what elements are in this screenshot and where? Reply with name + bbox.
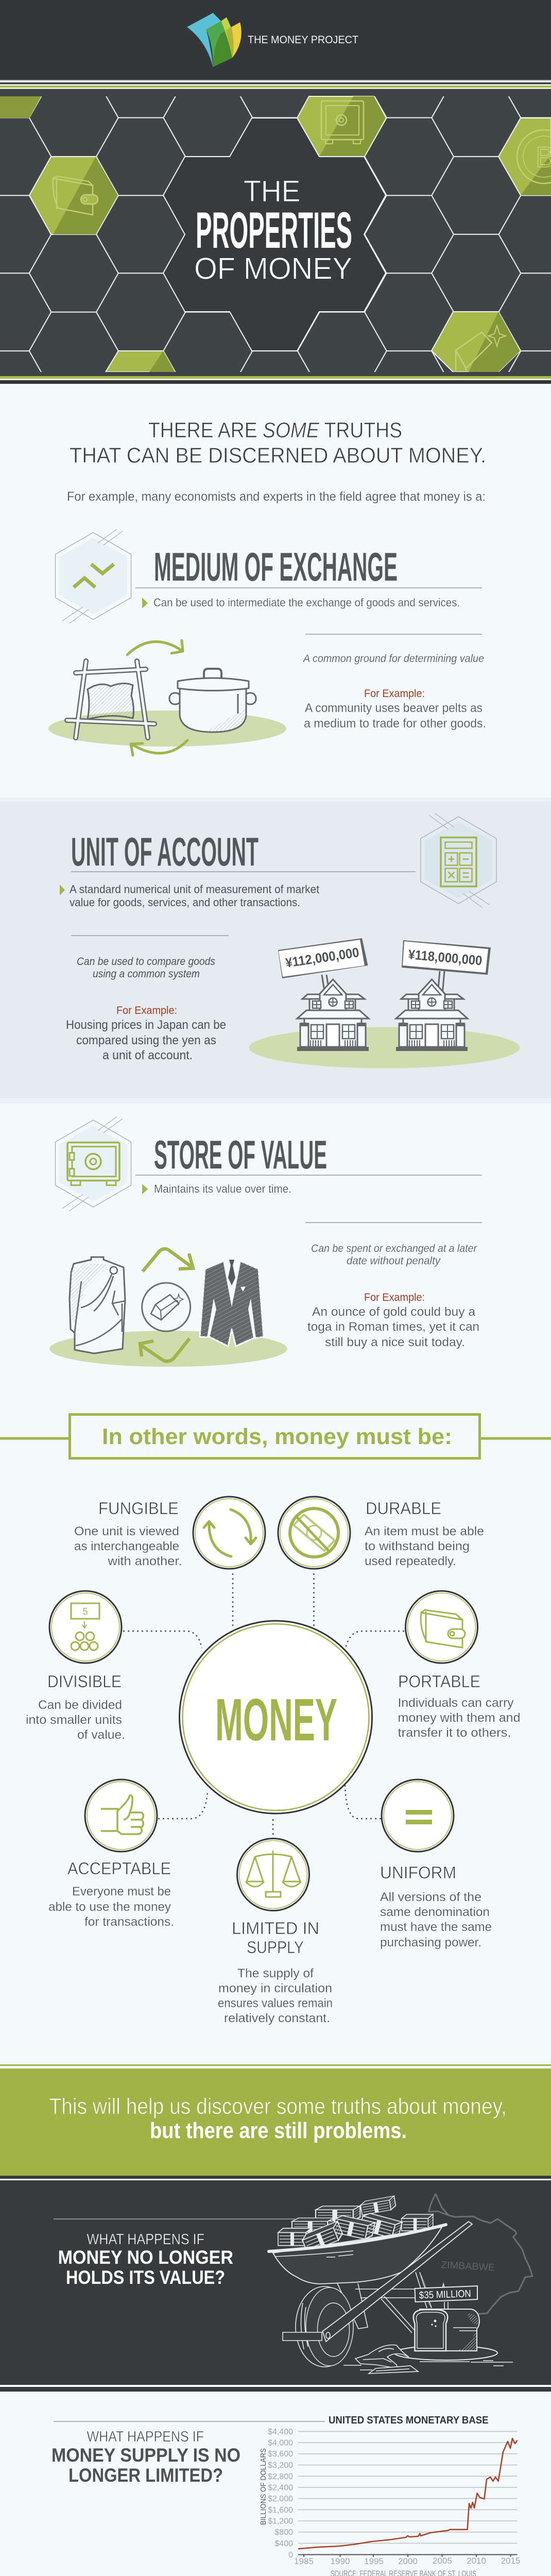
subtext [311,1243,477,1267]
property: fungible: as interchangeable [74,1539,179,1553]
example text: a unit of account. [102,1048,193,1062]
example text: For Example: [364,688,425,700]
icon: suit jacket [200,1260,264,1346]
hero bottom stripes [0,372,551,384]
illustration: houses with yen prices [249,938,520,1069]
property: limited in supply: LIMITED IN [232,1919,319,1938]
property: portable: transfer it to others. [398,1726,511,1740]
subtext: using a common system [93,968,200,980]
property: divisible: Can be divided [38,1698,122,1712]
connectors [123,1573,404,1836]
property: uniform: All versions of the [380,1890,481,1904]
arrow: bottom [140,1338,190,1361]
property: uniform: must have the same [380,1920,492,1934]
hexagon: wallet icon [29,157,118,234]
property: uniform: same denomination [380,1905,490,1919]
line chart: US monetary base [259,2415,520,2576]
logo: The Money Project [187,13,242,67]
y axis labels: $2,800 [268,2472,293,2481]
property: fungible: with another. [107,1554,182,1568]
banner: in other words [0,1415,551,1458]
y axis labels: $1,200 [268,2517,293,2526]
heading: MONEY NO LONGER [58,2247,233,2268]
icon: thumbs up [101,1795,143,1834]
money bundles [278,2196,433,2253]
hero panel: honeycomb with title [0,96,551,372]
subtext: Can be used to compare goods [77,956,215,968]
subtext: Can be spent or exchanged at a later [311,1243,477,1255]
property: divisible: into smaller units [26,1713,122,1727]
green banner: but there are still problems. [150,2118,407,2143]
y axis labels: 0 [288,2551,293,2560]
icon: exchange hexagon [56,529,131,623]
illustration: toga, gold, suit [49,1249,287,1367]
heading: MONEY SUPPLY IS NO [51,2445,240,2466]
y axis labels: $800 [274,2528,293,2537]
example text: For Example: [116,1005,177,1016]
heading: LONGER LIMITED? [68,2465,223,2486]
icon: cycle arrows [204,1510,256,1556]
icon: equals sign [406,1810,432,1824]
intro text: For example, many economists and experts in the field agree that money is a: [67,489,486,504]
icon: no ripped banknote [290,1509,338,1557]
fallen banknotes [355,2345,418,2374]
y axis labels: $1,600 [268,2506,293,2515]
definition: value for goods, services, and other transactions. [70,896,300,909]
icon: calculator hexagon [421,813,496,908]
intro heading: THAT CAN BE DISCERNED ABOUT MONEY. [70,443,486,467]
hexagon: gold bar icon [432,312,520,372]
property: divisible: DIVISIBLE [47,1672,122,1691]
property: durable: DURABLE [366,1499,441,1518]
price sign 2 [402,940,491,975]
price sign 1: ¥112,000,000 [284,944,360,971]
highlighted hexagon top left [0,96,41,118]
price sign 1 [278,938,368,978]
x axis labels: 2010 [467,2556,486,2566]
icon: cooking pot [169,669,256,732]
intro heading [70,418,486,467]
intro heading: THERE ARE SOME TRUTHS [148,418,402,442]
definition [60,883,319,909]
logo wordmark: THE MONEY PROJECT [248,34,358,46]
x axis labels: 1990 [331,2556,350,2566]
example text [304,688,486,731]
tub [273,2227,442,2284]
icon: banknote to coins [71,1603,99,1650]
property: divisible [26,1591,125,1742]
property: limited in supply: The supply of [237,1967,314,1980]
title: THE [244,175,301,208]
x axis labels: 1995 [364,2556,384,2566]
icon: safe hexagon [56,1117,131,1211]
property: limited in supply: ensures values remain [218,1996,333,2010]
x axis labels: 1985 [294,2556,314,2566]
property: portable: money with them and [398,1711,520,1725]
property: limited in supply [218,1838,333,2025]
property: portable [398,1591,520,1740]
wheel [283,2286,353,2367]
y axis labels: $3,600 [268,2450,293,2459]
property: fungible [74,1497,265,1569]
panel: store of value [49,1117,482,1367]
y axis labels: $400 [274,2539,293,2548]
property: acceptable: Everyone must be [72,1885,171,1899]
loaf of bread on plate [343,2309,513,2370]
example text: Housing prices in Japan can be [66,1018,226,1032]
property: uniform: UNIFORM [380,1863,456,1882]
subtext [77,956,215,980]
example text [66,1005,226,1062]
map: Zimbabwe [421,2194,532,2314]
example text: An ounce of gold could buy a [312,1305,476,1319]
icon: gold bar in circle [142,1283,191,1331]
title: OF MONEY [194,251,352,285]
example text: still buy a nice suit today. [325,1335,465,1349]
example text: A community uses beaver pelts as [305,701,483,715]
arrow: pot to pelt [131,740,187,755]
property: durable: to withstand being [365,1539,470,1553]
icon: house 1 [297,979,369,1051]
frame struts [337,2272,432,2333]
property: durable [278,1497,484,1569]
handle [322,2222,472,2342]
central circle: money [179,1621,372,1814]
property: divisible: of value. [77,1728,125,1742]
price sign 2: ¥118,000,000 [407,946,483,969]
property: durable: used repeatedly. [365,1554,456,1568]
panel: money no longer holds value [0,2180,551,2392]
example text: toga in Roman times, yet it can [307,1320,479,1334]
hero panel: honeycomb with title: PROPERTIES [196,201,352,259]
property: uniform: purchasing power. [380,1936,481,1950]
property: limited in supply: money in circulation [218,1981,332,1995]
property: limited in supply: SUPPLY [247,1938,304,1957]
property: acceptable: able to use the money [48,1900,171,1914]
heading: HOLDS ITS VALUE? [66,2267,225,2288]
example text [307,1292,479,1349]
hexagon: bitcoin icon [498,118,551,195]
icon: house 2 [396,979,468,1051]
title [194,175,352,285]
arrow: top [143,1249,193,1272]
hexagon bottom [106,351,175,372]
icon: balance scale [246,1851,301,1897]
property: fungible: One unit is viewed [74,1524,179,1538]
example text: a medium to trade for other goods. [304,717,486,731]
hexagon: safe icon [297,96,386,157]
x axis labels: 2000 [398,2556,418,2566]
example text: For Example: [364,1292,425,1303]
header stripes [0,79,551,96]
y axis labels: $2,000 [268,2495,293,2503]
y axis labels: $2,400 [268,2483,293,2493]
map: Zimbabwe: ZIMBABWE [441,2260,495,2273]
y axis title: BILLIONS OF DOLLARS [259,2448,268,2525]
x axis labels: 2005 [433,2556,452,2566]
illustration: wheelbarrow of cash [269,2196,513,2374]
icon: toga [70,1257,125,1353]
chart title: UNITED STATES MONETARY BASE [329,2415,488,2426]
property: portable: Individuals can carry [398,1696,514,1710]
icon: banknote to coins: 5 [82,1606,88,1617]
y axis labels: $3,200 [268,2461,293,2470]
icon: beaver pelt frame [67,661,154,738]
diagram: properties around money [26,1497,520,2025]
panel: unit of account [0,798,551,1104]
definition: Can be used to intermediate the exchange of goods and services. [153,596,460,609]
panel: money supply no longer limited [51,2415,520,2576]
heading [51,2429,240,2486]
property: fungible: FUNGIBLE [98,1499,179,1518]
y axis labels: $4,400 [268,2428,293,2436]
property: acceptable [48,1780,174,1929]
subtext: date without penalty [347,1255,441,1267]
property: acceptable: for transactions. [84,1915,174,1929]
price tag: $35 MILLION [419,2288,471,2301]
x axis labels [294,2556,520,2566]
definition: A standard numerical unit of measurement of market [70,883,319,895]
icon: wallet [421,1610,465,1648]
property: acceptable: ACCEPTABLE [67,1859,171,1878]
definition: Maintains its value over time. [154,1182,291,1195]
central dark hexagon cluster [163,118,386,351]
property: portable: PORTABLE [398,1672,480,1691]
price tag [415,2284,477,2309]
property: limited in supply: relatively constant. [224,2011,330,2025]
banner: in other words: In other words, money must be: [102,1424,452,1449]
property: durable: An item must be able [365,1524,484,1538]
heading: WHAT HAPPENS IF [87,2429,204,2445]
heading: UNIT OF ACCOUNT [71,829,259,874]
property: uniform [380,1780,492,1950]
illustration: pelt and pot barter [48,640,286,755]
gridlines [298,2431,517,2543]
panel: medium of exchange [48,529,486,755]
y axis labels: $4,000 [268,2439,293,2447]
y axis labels [268,2428,293,2560]
arrow: pelt to pot [127,640,183,655]
data line [298,2438,517,2549]
subtext: A common ground for determining value [302,653,484,665]
x axis labels: 2015 [501,2556,520,2566]
panel: store of value: STORE OF VALUE [154,1132,327,1177]
heading: WHAT HAPPENS IF [87,2231,204,2248]
header banner [0,0,551,79]
green banner: This will help us discover some truths about money, [49,2094,507,2119]
heading [58,2231,233,2288]
central circle: money: MONEY [215,1686,337,1753]
example text: compared using the yen as [76,1033,216,1047]
green banner [0,2064,551,2180]
